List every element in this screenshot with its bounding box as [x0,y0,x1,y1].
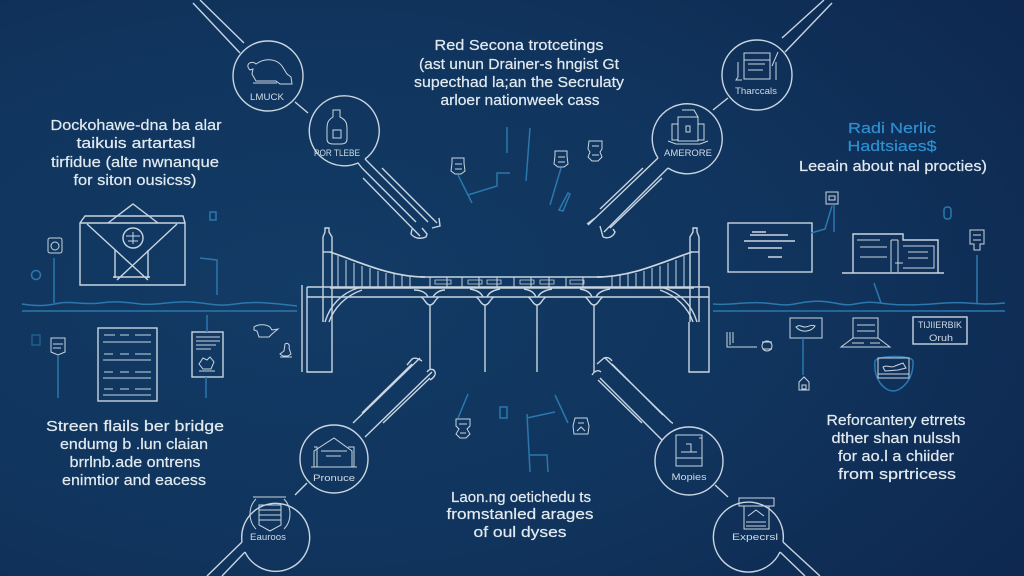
node: Pronuce: Pronuce [313,473,355,484]
connector: blue tick [874,283,881,303]
line: bottom centre blue strokes [458,394,568,472]
bridge: end arches [325,288,697,322]
panel: laptop with two screens [842,234,944,273]
text block: bottom right [826,413,966,483]
icon: bottom centre badge two [573,418,589,434]
text block: bottom left: enimtior and eacess [62,473,206,489]
icon: mouse [254,325,278,337]
bottom right node chain [592,358,820,576]
icon: left upper badge [48,238,62,303]
tail: bridge to bottom right node [592,358,728,497]
panel: labelled box: Oruh [929,333,953,344]
bridge: right cable and hangers [597,252,692,287]
text block: bottom centre: of oul dyses [474,525,566,541]
node: Amerore [652,104,722,174]
icon: bottom centre blue rectangle [500,407,507,418]
node: Eaurocs: Eauroos [250,532,286,543]
text block: top left: for siton ousicss) [74,173,196,189]
top left node chain [193,0,440,238]
panel: labelled box: TIJIIERBIK [918,320,963,331]
node: Tharccals [722,40,792,110]
text block: bottom centre: fromstanled arages [446,507,594,523]
node: Mopies [655,427,723,495]
bridge: left cable and hangers [330,252,425,287]
bridge: piers and brackets [414,289,610,372]
panel: labelled box [913,317,967,344]
icon: top centre badge three [588,141,602,161]
text block: top centre: (ast unun Drainer-s hngist Gt [419,57,619,73]
tail: top right to bridge [587,158,668,238]
text block: top left [50,118,222,189]
text block: top centre [414,38,625,109]
text block: top centre: arloer nationweek cass [440,93,600,109]
text block: top right: Leeain about nal procties) [799,159,987,175]
node: Tharccals: Tharccals [735,86,777,97]
node: Pronuce [300,425,368,493]
node: Mopies: Mopies [672,472,707,483]
icon: small clock [32,270,40,280]
text block: bottom right: Reforcantery etrrets [826,413,966,429]
node: Expecrsl [713,498,783,572]
icon: bottom centre badge one [456,419,470,438]
text block: top centre: Red Secona trotcetings [434,38,604,54]
panel: poster [192,315,223,398]
tail: bottom left node to edge [207,542,245,576]
node: Por Tlebe [309,96,379,168]
bridge: right tower and pier [689,228,709,372]
text block: bottom left: endumg b .lun claian [60,437,208,453]
right water line [713,301,1005,311]
icon: left lower badge [32,335,65,398]
text block: bottom left: Streen flails ber bridge [46,419,224,435]
bottom centre sketch: icons and lines [456,394,589,472]
icon: framed display [790,318,822,375]
icon: tag [799,377,809,390]
text block: bottom right: for ao.l a chiider [838,449,954,465]
bridge [302,228,709,372]
node: Expecrsl: Expecrsl [732,532,778,543]
icon: top centre badge one [451,158,465,174]
text block: bottom right: from sprtricess [838,467,956,483]
icon: small laptop [841,318,890,347]
text block: top right: Radi Nerlic [848,121,936,137]
bridge: deck and truss [307,277,709,297]
tail: top left to bridge [362,159,440,238]
line: top centre second strokes [550,168,570,211]
panel: right screen [728,205,834,272]
node: Por Tlebe: POR TLEBE [314,148,360,159]
text block: top centre: supecthad la;an the Secrulaty [414,75,625,91]
icon: small figure [280,343,292,357]
text block: top left: Dockohawe-dna ba alar [50,118,222,134]
text block: bottom left: brrlnb.ade ontrens [70,455,200,471]
tail: bridge to bottom left node [295,358,435,495]
icon: blue oval [944,207,951,219]
left water line [22,302,297,311]
text block: top right [799,121,987,175]
text block: bottom right: dther shan nulssh [832,431,960,447]
text block: top left: taikuis artartasl [76,136,196,152]
node: Lamuck: LMUCK [250,92,285,103]
icon: right top badge [826,192,838,204]
node: Lamuck [233,41,303,111]
panel: document [98,328,157,401]
icon: hook and gauge [727,332,772,351]
top right node chain [587,0,832,238]
node: Amerore: AMERORE [664,148,712,159]
text block: top left: tirfidue (alte nwnanque [51,155,219,171]
icon: top centre badge two [554,151,568,167]
text block: top right: Hadtsiaes$ [848,139,936,155]
connector: left blue bracket [200,258,217,295]
text block: bottom left [46,419,224,489]
bridge: left tower and pier [302,228,332,372]
node: Eaurocs [242,497,310,571]
text block: bottom centre: Laon.ng oetichedu ts [451,490,591,506]
line: top centre blue strokes [458,127,530,203]
tail: bottom right node to edge [780,542,820,576]
icon: envelope [80,204,185,285]
text block: bottom centre [446,490,594,541]
top centre sketch: icons and lines [451,127,602,211]
icon: circled device [875,356,913,391]
bottom left node chain [207,358,435,576]
icon: small blue rectangle [210,212,216,220]
icon: right far badge [970,230,984,303]
